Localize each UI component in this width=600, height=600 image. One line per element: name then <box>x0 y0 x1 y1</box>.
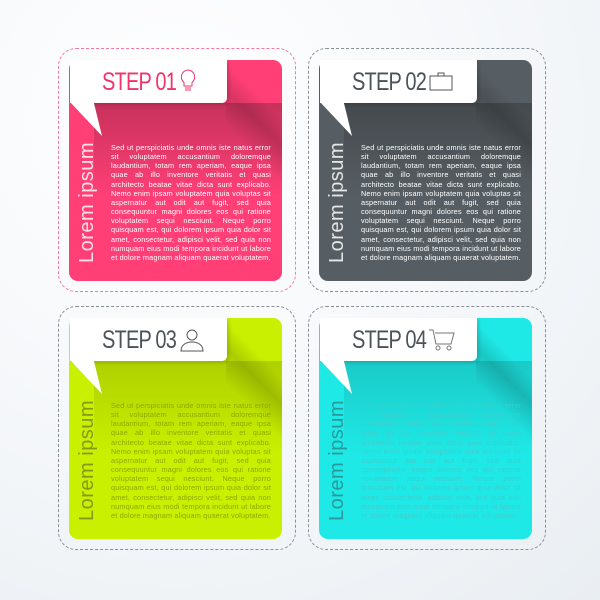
label: lorem ipsum: Lorem ipsum <box>326 400 348 521</box>
text block: Sed ut perspiciatis unde omnis iste natus error sit voluptatem accusantium doloremque laudantium, totam rem aperiam, eaque ipsa quae ab illo inventore veritatis et quasi architecto beatae vitae dicta sunt explicabo. Nemo enim ipsam voluptatem quia voluptas sit aspernatur aut odit aut fugit, sed quia consequuntur magni dolores eos qui ratione voluptatem sequi nesciunt. Neque porro quisquam est, qui dolorem ipsum quia dolor sit amet, consectetur, adipisci velit, sed quia non numquam eius modi tempora incidunt ut labore et dolore magnam aliquam quaerat voluptatem. <box>111 143 271 262</box>
panel: step 01 <box>69 60 282 281</box>
label: lorem ipsum: Lorem ipsum <box>76 400 98 521</box>
text block: Sed ut perspiciatis unde omnis iste natus error sit voluptatem accusantium doloremque laudantium, totam rem aperiam, eaque ipsa quae ab illo inventore veritatis et quasi architecto beatae vitae dicta sunt explicabo. Nemo enim ipsam voluptatem quia voluptas sit aspernatur aut odit aut fugit, sed quia consequuntur magni dolores eos qui ratione voluptatem sequi nesciunt. Neque porro quisquam est, qui dolorem ipsum quia dolor sit amet, consectetur, adipisci velit, sed quia non numquam eius modi tempora incidunt ut labore et dolore magnam aliquam quaerat voluptatem. <box>361 143 521 262</box>
card: step 02 <box>308 48 546 292</box>
card: step 01 <box>58 48 296 292</box>
heading: step 02: STEP 02 <box>352 68 426 96</box>
icon: cart <box>429 330 455 350</box>
text block: Sed ut perspiciatis unde omnis iste natus error sit voluptatem accusantium doloremque laudantium, totam rem aperiam, eaque ipsa quae ab illo inventore veritatis et quasi architecto beatae vitae dicta sunt explicabo. Nemo enim ipsam voluptatem quia voluptas sit aspernatur aut odit aut fugit, sed quia consequuntur magni dolores eos qui ratione voluptatem sequi nesciunt. Neque porro quisquam est, qui dolorem ipsum quia dolor sit amet, consectetur, adipisci velit, sed quia non numquam eius modi tempora incidunt ut labore et dolore magnam aliquam quaerat voluptatem. <box>111 401 271 520</box>
icon: briefcase <box>430 72 452 90</box>
label: lorem ipsum: Lorem ipsum <box>326 142 348 263</box>
heading: step 03: STEP 03 <box>102 326 176 354</box>
heading: step 04: STEP 04 <box>352 326 426 354</box>
text block: Sed ut perspiciatis unde omnis iste natus error sit voluptatem accusantium doloremque laudantium, totam rem aperiam, eaque ipsa quae ab illo inventore veritatis et quasi architecto beatae vitae dicta sunt explicabo. Nemo enim ipsam voluptatem quia voluptas sit aspernatur aut odit aut fugit, sed quia consequuntur magni dolores eos qui ratione voluptatem sequi nesciunt. Neque porro quisquam est, qui dolorem ipsum quia dolor sit amet, consectetur, adipisci velit, sed quia non numquam eius modi tempora incidunt ut labore et dolore magnam aliquam quaerat voluptatem. <box>361 401 521 520</box>
panel: step 03 <box>69 318 282 539</box>
card: step 04 <box>308 306 546 550</box>
label: lorem ipsum: Lorem ipsum <box>76 142 98 263</box>
icon: user <box>180 330 204 352</box>
heading: step 01: STEP 01 <box>102 68 176 96</box>
card: step 03 <box>58 306 296 550</box>
panel: step 04 <box>319 318 532 539</box>
panel: step 02 <box>319 60 532 281</box>
icon: light bulb <box>180 70 196 90</box>
